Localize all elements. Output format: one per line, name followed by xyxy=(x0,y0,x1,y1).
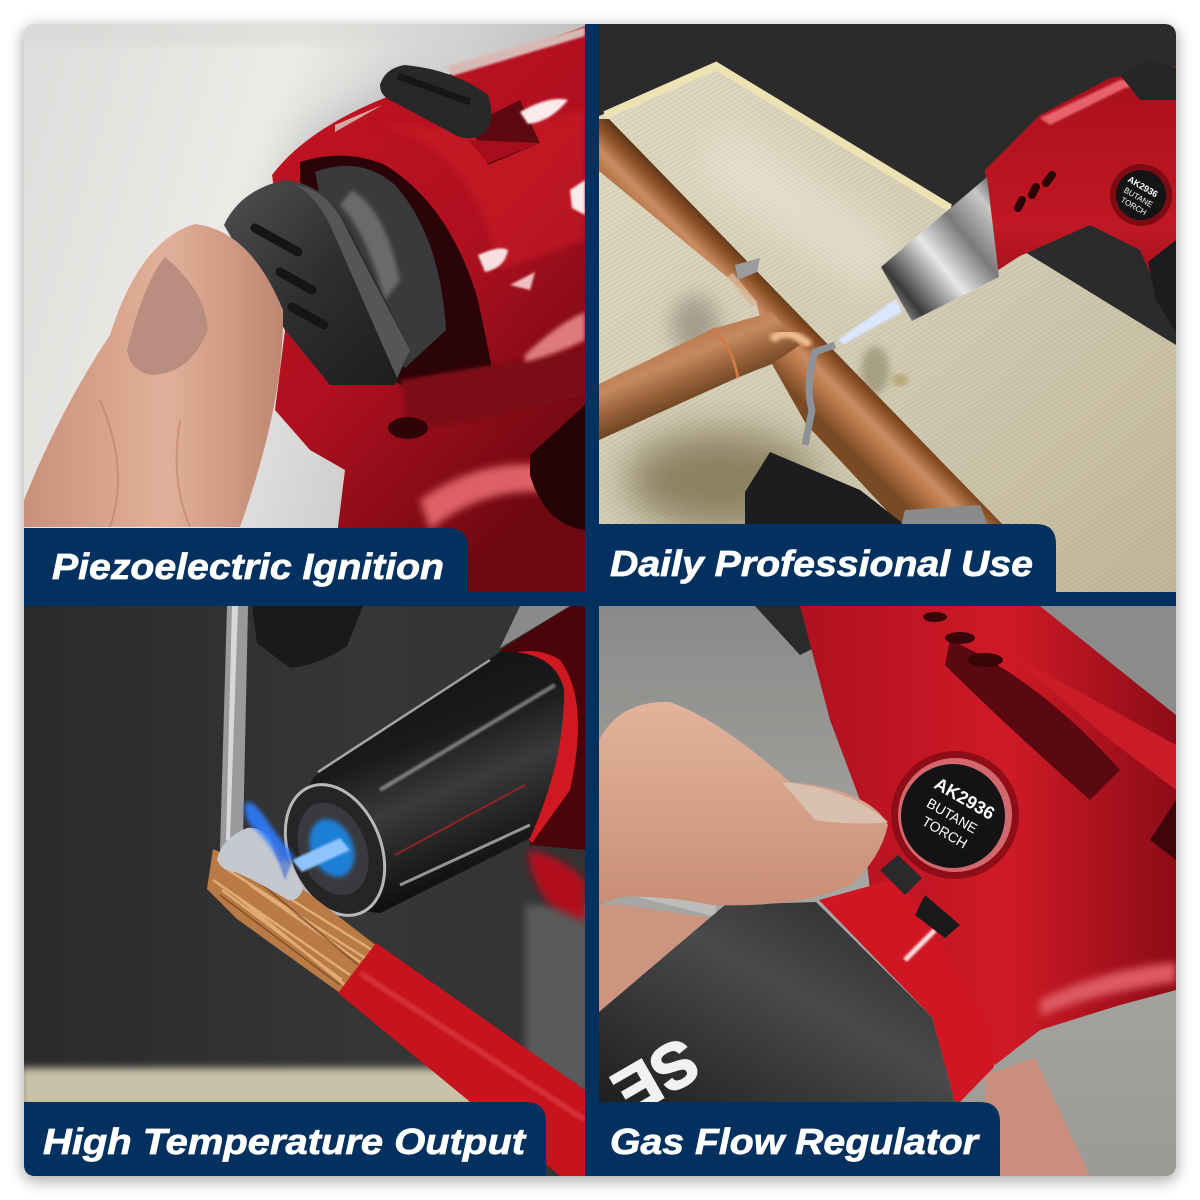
label: piezoelectric ignition xyxy=(24,528,585,606)
label: gas flow regulator xyxy=(599,1102,1000,1176)
solder rod xyxy=(220,606,248,850)
torch badge: BUTANE xyxy=(924,795,980,837)
label: daily professional use: Daily Professional Use xyxy=(610,543,1033,584)
torch badge xyxy=(1110,164,1172,226)
torch body xyxy=(985,66,1176,332)
torch badge: TORCH xyxy=(1119,195,1148,217)
label: high temperature output: High Temperature Output xyxy=(43,1121,527,1162)
red torch body xyxy=(272,26,585,592)
label: gas flow regulator: Gas Flow Regulator xyxy=(610,1121,980,1162)
dark recess around knob xyxy=(300,156,492,385)
pliers xyxy=(745,452,902,524)
torch badge: AK2936 xyxy=(1126,174,1160,199)
torch vents xyxy=(1018,175,1052,208)
torch badge: AK2936 xyxy=(931,773,998,824)
brand lettering: SE xyxy=(601,1024,711,1129)
thumb xyxy=(599,702,888,905)
thumb xyxy=(24,224,283,527)
label: high temperature output xyxy=(24,1102,546,1176)
silver nozzle xyxy=(881,177,999,321)
panel: daily professional use photo xyxy=(599,24,1176,592)
torch badge xyxy=(891,751,1019,879)
panel: piezoelectric ignition photo xyxy=(24,24,585,592)
panel: high temperature output photo xyxy=(20,606,590,1176)
lower hand xyxy=(599,905,710,1012)
label: daily professional use xyxy=(599,524,1176,606)
woven cloth xyxy=(599,62,1176,592)
torch badge: TORCH xyxy=(919,813,970,852)
torch red body xyxy=(500,606,585,850)
torch badge: BUTANE xyxy=(1122,186,1154,209)
torch flame xyxy=(838,299,902,344)
label: piezoelectric ignition: Piezoelectric Ignition xyxy=(52,546,444,587)
icon: black piezo knob xyxy=(315,166,446,368)
icon: ignition switch xyxy=(380,65,491,138)
glossy highlights xyxy=(520,99,568,124)
red torch body xyxy=(800,606,1176,1065)
black torch collar xyxy=(755,606,812,655)
scorch marks xyxy=(625,430,815,530)
glove xyxy=(252,606,363,668)
panel: gas flow regulator photo xyxy=(599,606,1176,1176)
blue flame xyxy=(245,802,295,880)
red collar xyxy=(819,878,994,1102)
solder blob xyxy=(217,828,303,900)
black grip xyxy=(599,902,955,1102)
vents xyxy=(923,612,947,622)
black torch nozzle xyxy=(297,652,564,913)
solder wire xyxy=(805,345,835,445)
red cable xyxy=(338,943,585,1176)
regulator wheel xyxy=(880,855,922,895)
copper strands xyxy=(207,849,377,993)
copper pipe assembly xyxy=(599,119,1008,530)
body hole xyxy=(388,417,428,439)
nozzle mouth xyxy=(284,783,386,917)
